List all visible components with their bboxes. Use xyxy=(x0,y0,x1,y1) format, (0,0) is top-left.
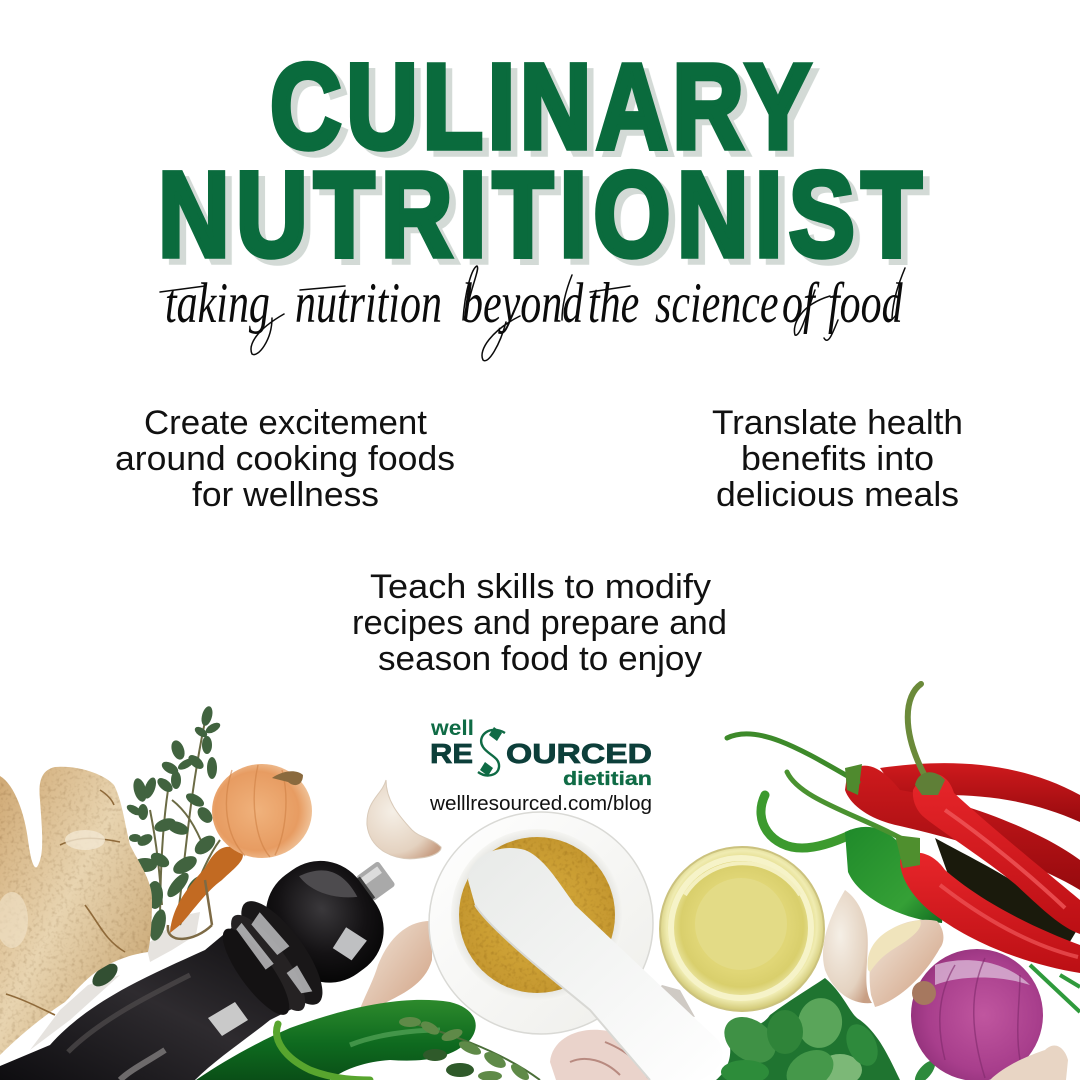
pepper mill xyxy=(0,825,425,1080)
shallot bottom right xyxy=(990,1045,1068,1080)
top red chili xyxy=(908,684,926,778)
tagline script: nutrition xyxy=(295,272,442,335)
logo: well resourced dietitian xyxy=(429,717,652,815)
text: teach skills: Teach skills to modify xyxy=(370,568,712,606)
ginger xyxy=(0,767,152,1055)
logo url: welllresourced.com/blog xyxy=(429,793,652,815)
text: create excitement: around cooking foods xyxy=(115,440,455,478)
upper thin red pepper xyxy=(880,763,1080,822)
logo: well resourced dietitian: RE xyxy=(430,738,473,769)
tagline script: science xyxy=(655,272,779,335)
text: teach skills: season food to enjoy xyxy=(378,640,703,678)
garlic cloves right xyxy=(823,890,943,1007)
text: translate health benefits: delicious meals xyxy=(716,476,959,514)
garlic bulb bottom xyxy=(550,1030,668,1080)
green chili xyxy=(761,795,852,848)
tagline script: of xyxy=(782,272,820,335)
thyme sprig xyxy=(88,705,222,991)
pestle xyxy=(468,848,722,1080)
oil bowl xyxy=(660,847,824,1011)
text: create excitement: Create excitement xyxy=(144,404,427,442)
logo: well resourced dietitian: dietitian xyxy=(563,769,652,790)
tagline script: taking xyxy=(165,272,270,335)
text: translate health benefits: Translate health xyxy=(712,404,963,442)
chili peppers xyxy=(727,684,1080,1012)
red pepper rear xyxy=(845,766,1080,890)
logo: well resourced dietitian: OURCED xyxy=(506,738,652,769)
mint leaves xyxy=(716,978,939,1080)
herb sprig bottom xyxy=(399,1017,540,1080)
text: create excitement xyxy=(115,404,455,514)
green stems right xyxy=(1030,965,1080,1012)
text: translate health benefits: benefits into xyxy=(741,440,934,478)
front red chili xyxy=(787,772,908,842)
text: teach skills xyxy=(352,568,727,678)
tagline script: beyond xyxy=(462,272,584,335)
garlic clove lower xyxy=(355,921,432,1023)
mortar with spice xyxy=(429,812,653,1034)
title: CULINARY xyxy=(270,40,816,174)
paper scraps xyxy=(30,912,200,1050)
red onion xyxy=(911,949,1043,1080)
logo: well resourced dietitian: well xyxy=(430,717,474,740)
grey patches xyxy=(643,985,695,1017)
dark shadow xyxy=(935,838,1080,950)
title: NUTRITIONIST xyxy=(158,148,928,282)
tagline script xyxy=(160,266,905,361)
text: create excitement: for wellness xyxy=(192,476,379,514)
garlic clove upper xyxy=(367,780,441,859)
onion xyxy=(168,764,312,939)
green pepper bottom xyxy=(196,1000,476,1080)
tagline script: the xyxy=(588,272,639,335)
tagline script: food xyxy=(828,272,904,335)
title xyxy=(158,40,928,282)
food illustration xyxy=(0,684,1080,1080)
text: teach skills: recipes and prepare and xyxy=(352,604,727,642)
text: translate health benefits xyxy=(712,404,963,514)
